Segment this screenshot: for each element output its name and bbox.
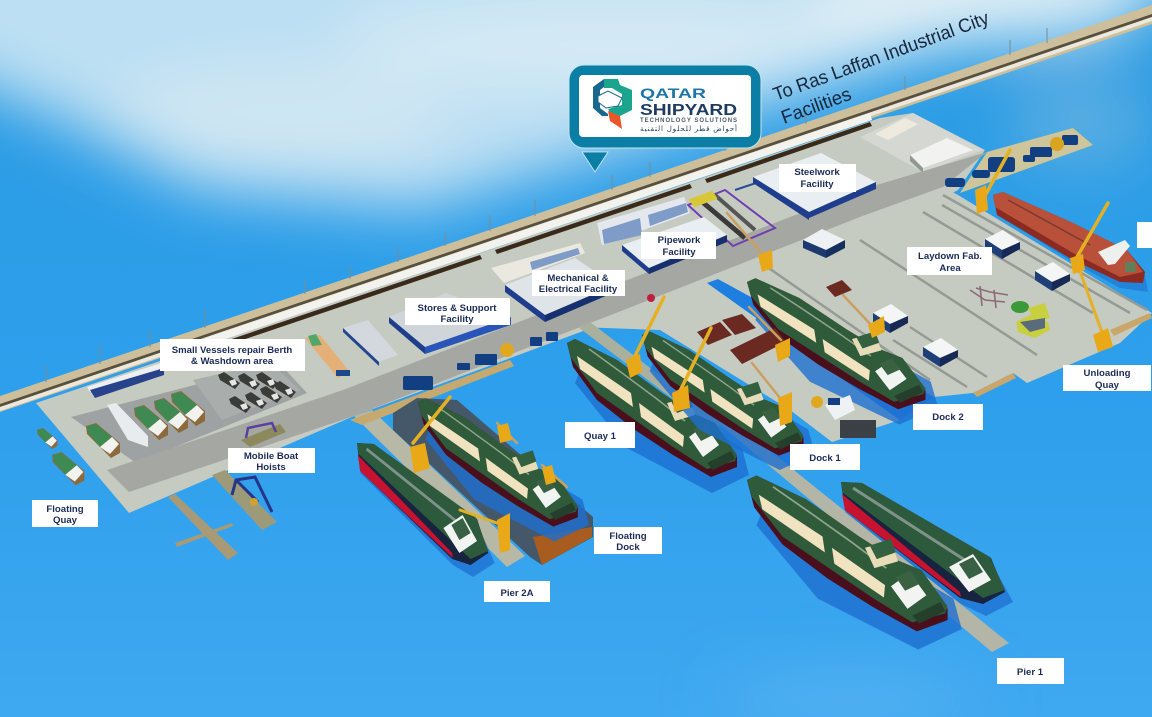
building: pipework facility — [622, 217, 727, 274]
logo wordmark: SHIPYARD — [640, 102, 737, 119]
label: Mechanical & Electrical Facility: Mechanical & — [547, 273, 609, 284]
building: warehouse — [343, 320, 398, 366]
T pier — [168, 494, 238, 560]
utility plant — [860, 113, 983, 173]
yellow cranes — [410, 150, 1113, 553]
right laydown yard — [718, 187, 1152, 397]
ship: pier 1 right tanker — [841, 482, 1013, 616]
label: Dock 1: Dock 1 — [809, 453, 841, 464]
ship: dock 2 LNG carrier — [747, 278, 938, 424]
label: Floating Dock: Floating — [609, 531, 647, 542]
label: Floating Quay: Quay — [53, 515, 78, 526]
label: Small Vessels repair Berth & Washdown area — [160, 339, 305, 371]
mobile boat hoist, lower — [232, 477, 272, 512]
boats in yard — [37, 372, 296, 485]
pier 2A — [354, 410, 525, 567]
label: Dock 1 — [790, 444, 860, 470]
dock 1 yard — [578, 283, 900, 442]
module on laydown yard — [1011, 301, 1050, 338]
coloured container stack — [305, 334, 350, 378]
label: Pier 1 — [997, 658, 1064, 684]
mobile hoist dock — [212, 470, 277, 530]
label: Floating Quay — [32, 500, 98, 527]
label: Unloading Quay — [1063, 365, 1151, 391]
jetty — [960, 128, 1093, 193]
logo wordmark: QATAR — [640, 85, 706, 101]
causeway carriageway — [0, 14, 1152, 411]
ship: pier 1 LNG carrier — [747, 475, 962, 650]
ship: pier 2A tanker — [357, 443, 495, 577]
steel plates on dock 1 yard — [697, 280, 852, 364]
label: Pier 2A: Pier 2A — [500, 588, 534, 599]
main road — [107, 152, 987, 492]
building: mechanical and electrical facility — [505, 258, 615, 322]
label: Unloading Quay: Unloading — [1084, 368, 1131, 379]
causeway lamp posts — [46, 28, 1047, 382]
label: Small Vessels repair Berth & Washdown area: Small Vessels repair Berth — [172, 345, 292, 356]
quay 1 pier — [578, 322, 725, 428]
label: blank tag at right edge — [1137, 222, 1152, 248]
boat yard apron — [71, 362, 307, 463]
label: Steelwork Facility: Facility — [800, 179, 834, 190]
mobile boat hoist, upper — [241, 423, 286, 447]
rail tracks on laydown yard — [760, 195, 1147, 387]
building: stores and support facility — [389, 293, 511, 354]
label: Pipework Facility: Facility — [662, 247, 696, 258]
label: Floating Dock — [594, 527, 662, 554]
building: steelwork facility — [753, 153, 876, 220]
label: Pier 2A — [484, 581, 550, 602]
dock 2 water — [707, 279, 934, 420]
label: Pipework Facility — [641, 232, 716, 259]
logo wordmark: أحواض قطر للحلول التقنية — [640, 124, 737, 133]
label: Steelwork Facility — [779, 164, 856, 192]
logo white panel — [579, 75, 751, 137]
direction note: To Ras Laffan Industrial City — [771, 8, 992, 106]
label: Mobile Boat Hoists — [228, 448, 315, 473]
building: small vessel hangar — [87, 363, 164, 398]
label: Stores & Support Facility: Facility — [440, 314, 474, 325]
ship: floating dock LNG carrier — [418, 398, 589, 542]
label: Pipework Facility: Pipework — [658, 235, 701, 246]
building: small shed — [803, 229, 845, 258]
label: Mobile Boat Hoists: Hoists — [256, 462, 286, 473]
label: Quay 1 — [565, 422, 635, 448]
label: Steelwork Facility: Steelwork — [794, 167, 840, 178]
label: Floating Quay: Floating — [46, 504, 84, 515]
label: Mechanical & Electrical Facility — [532, 270, 625, 296]
direction note: Facilities — [779, 84, 854, 129]
label: Mobile Boat Hoists: Mobile Boat — [244, 451, 299, 462]
logo wordmark — [640, 85, 737, 133]
label: Small Vessels repair Berth & Washdown area: & Washdown area — [191, 356, 274, 367]
floating dock — [393, 398, 593, 565]
unloading quay edges — [973, 313, 1152, 397]
pipe rack on laydown yard — [970, 286, 1008, 308]
label: Dock 2: Dock 2 — [932, 412, 964, 423]
label: Unloading Quay: Quay — [1095, 380, 1120, 391]
ship: quay 1 LNG carrier — [567, 339, 749, 493]
logo marker — [569, 65, 761, 148]
logo frame — [569, 65, 761, 148]
label: Dock 2 — [913, 404, 983, 430]
shelters on laydown yard — [873, 230, 1070, 367]
office blocks — [491, 197, 690, 283]
pier 1 — [711, 414, 1009, 652]
ship: red tanker at unloading quay — [993, 192, 1148, 292]
main yard land — [36, 113, 985, 513]
trestle walkway — [350, 360, 514, 425]
logo wordmark: TECHNOLOGY SOLUTIONS — [640, 118, 737, 124]
vehicles at dock 1 head — [811, 395, 876, 438]
label: Pier 1: Pier 1 — [1017, 667, 1044, 678]
logo pointer triangle — [582, 152, 608, 172]
label: Laydown Fab. Area: Laydown Fab. — [918, 251, 982, 262]
label: Floating Dock: Dock — [616, 542, 640, 553]
label: Quay 1: Quay 1 — [584, 431, 617, 442]
ship: dock 1 LNG carrier — [642, 331, 815, 470]
label: Laydown Fab. Area — [907, 247, 992, 275]
label: Laydown Fab. Area: Area — [939, 263, 961, 274]
causeway road base — [0, 5, 1152, 412]
logo icon — [593, 79, 632, 129]
label: Stores & Support Facility — [405, 298, 510, 325]
container stacks on jetty — [945, 135, 1078, 187]
label: Mechanical & Electrical Facility: Electrical Facility — [539, 284, 618, 295]
label: Stores & Support Facility: Stores & Support — [418, 303, 497, 314]
containers on road — [403, 294, 655, 390]
steelwork fabrication frames — [688, 180, 775, 246]
